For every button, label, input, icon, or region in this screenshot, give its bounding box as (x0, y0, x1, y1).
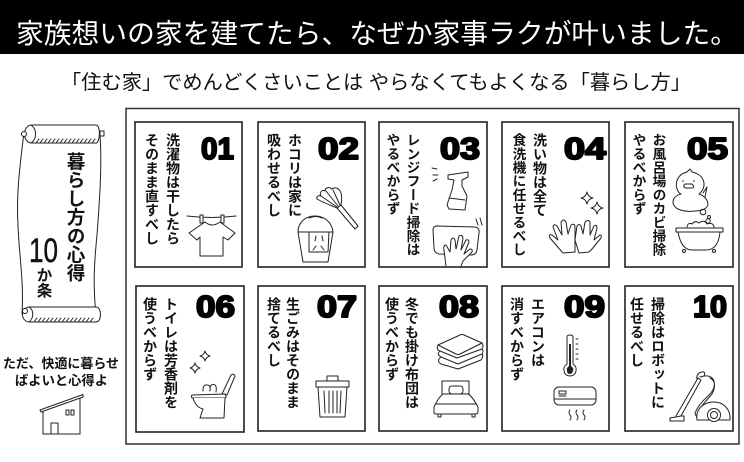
card 04 (502, 122, 609, 267)
icon: thermometer (564, 335, 578, 376)
side note (3, 356, 119, 388)
title banner: 家族想いの家を建てたら、なぜか家事ラクが叶いました。 (16, 18, 738, 49)
text 08: 冬でも掛け布団は (404, 296, 420, 409)
icon: toilet (192, 374, 235, 418)
card 05 (625, 122, 733, 267)
number 06: 06 (196, 289, 235, 324)
scroll number: 10 (29, 232, 58, 270)
text 07: 捨てるべし (266, 297, 282, 367)
icon: air conditioner (554, 387, 596, 420)
text 01 (144, 132, 181, 245)
text 04: 洗い物は全て (532, 132, 548, 217)
scroll bottom roller (22, 307, 100, 322)
icon: spray bottle (432, 168, 468, 210)
text 05: やるべからず (630, 133, 646, 216)
text 09 (509, 296, 546, 381)
side note: ただ、快適に暮らせ (3, 356, 119, 371)
card 07 (258, 286, 365, 431)
card 08 (379, 286, 487, 431)
text 02 (266, 133, 303, 217)
number 10: 10 (693, 289, 727, 324)
scroll suffix: か条 (34, 267, 52, 298)
icon: folded futon (437, 334, 483, 369)
text 04 (510, 132, 548, 257)
text 03: レンジフード掃除は (404, 133, 420, 257)
card 02 (258, 122, 365, 267)
number 09: 09 (564, 289, 605, 324)
number 01: 01 (201, 131, 234, 166)
text 05: お風呂場のカビ掃除 (650, 133, 666, 257)
text 02: ホコリは家に (287, 133, 303, 217)
panel frame: ten rules (126, 108, 739, 444)
scroll top roller (22, 125, 104, 143)
card 01 (135, 122, 242, 267)
text 09: 消すべからず (509, 296, 525, 381)
text 08: 使うべからず (384, 296, 400, 381)
number 07: 07 (317, 289, 357, 324)
icon: vacuum cleaner (670, 372, 730, 422)
icon: bathtub (676, 209, 723, 252)
icon: duck (673, 169, 708, 211)
text 04: 食洗機に任せるべし (510, 132, 526, 257)
icon: bucket and duster (298, 188, 358, 262)
icon: sparkles (581, 192, 603, 214)
icon: bed (434, 381, 478, 417)
icon: sparkles (190, 351, 210, 373)
number 05: 05 (687, 131, 728, 166)
text 06: 使うべからず (142, 296, 158, 381)
number 02: 02 (318, 131, 359, 166)
text 03: やるべからず (384, 133, 400, 216)
text 09: エアコンは (530, 297, 546, 367)
icon: shirt on line (187, 215, 236, 256)
subtitle: 「住む家」でめんどくさいことは やらなくてもよくなる「暮らし方」 (61, 71, 691, 94)
text 06 (142, 296, 179, 409)
text 10 (629, 296, 666, 409)
card 09 (502, 286, 609, 431)
scroll body (17, 132, 101, 316)
scroll heading: 暮らし方の心得 (64, 152, 86, 282)
title banner (0, 0, 744, 54)
text 03 (384, 133, 420, 257)
card 03 (379, 122, 487, 267)
number 03: 03 (440, 131, 480, 166)
icon: hand with cloth (433, 218, 482, 266)
icon: gloves (549, 220, 601, 253)
text 05 (630, 133, 666, 257)
number 08: 08 (439, 289, 479, 324)
text 10: 任せるべし (629, 297, 645, 367)
text 10: 掃除はロボットに (650, 296, 666, 409)
number 04: 04 (564, 131, 607, 166)
text 07: 生ごみはそのまま (285, 297, 301, 409)
text 02: 吸わせるべし (266, 133, 282, 217)
text 08 (384, 296, 420, 409)
side note: ばよいと心得よ (15, 373, 108, 388)
text 07 (266, 297, 301, 409)
card 06 (136, 286, 244, 432)
panel: scroll (17, 125, 104, 322)
icon: house (40, 394, 83, 434)
icon: trash can (316, 376, 349, 417)
text 01: そのまま直すべし (144, 133, 160, 245)
text 01: 洗濯物は干したら (165, 132, 181, 245)
text 06: トイレは芳香剤を (163, 297, 179, 409)
card 10 (625, 286, 733, 431)
